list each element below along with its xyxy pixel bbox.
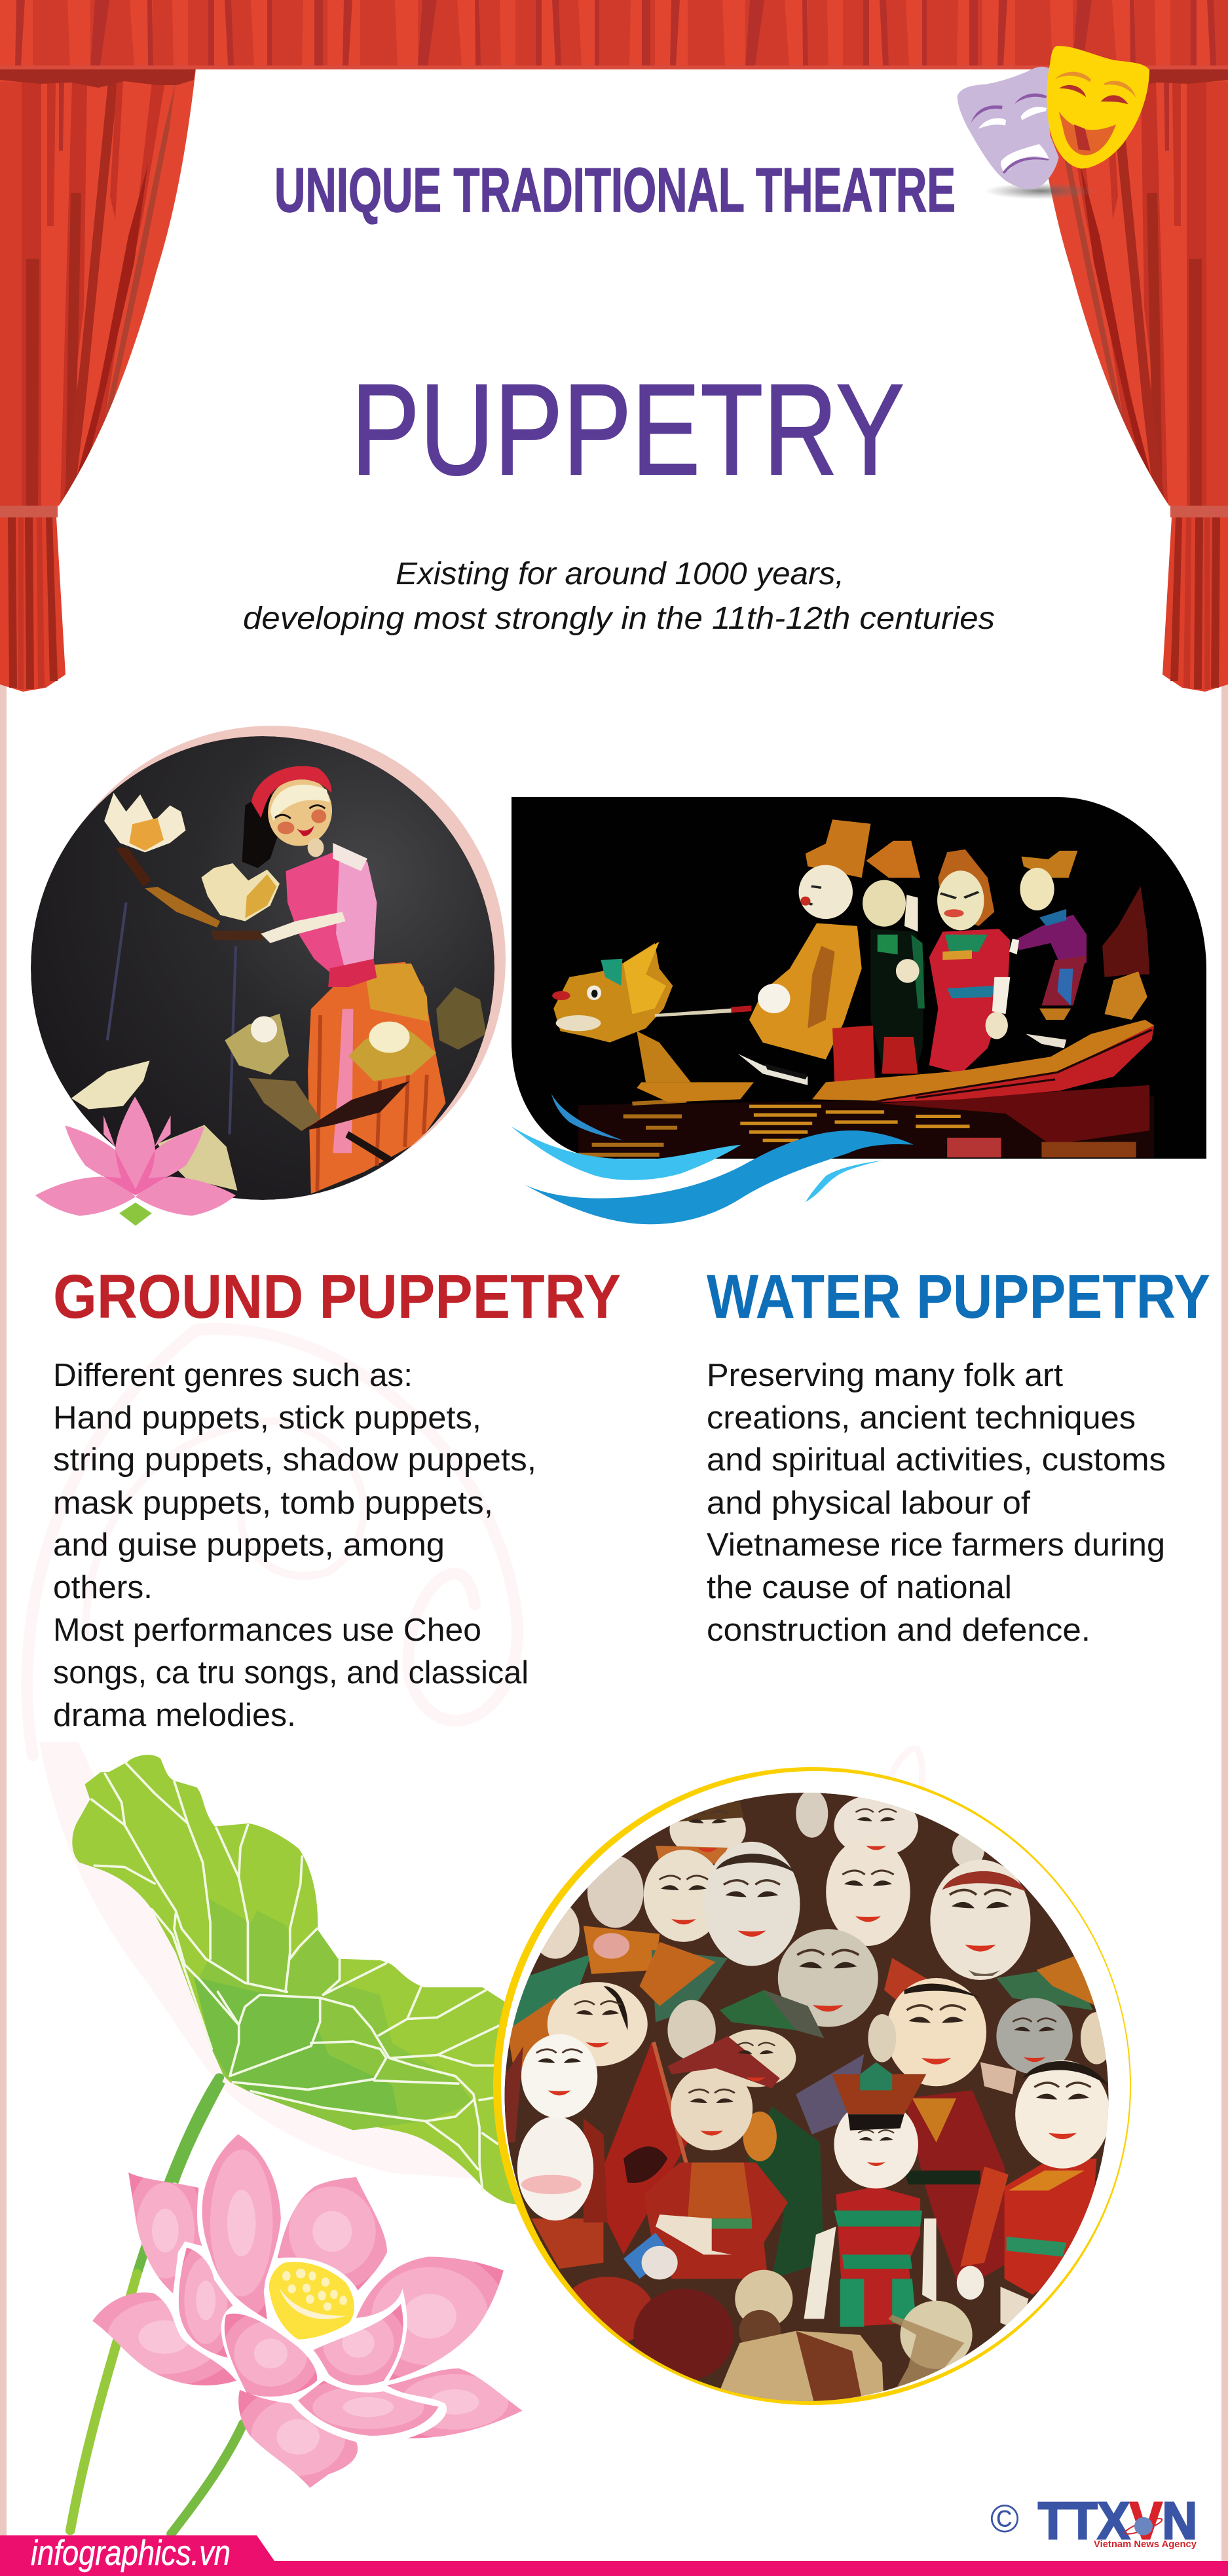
text: ground puppetry description: and guise puppets, among (53, 1527, 445, 1563)
flower 1 (104, 793, 185, 852)
petals (92, 2134, 523, 2488)
green coat (748, 2106, 824, 2279)
photo: crowd of painted water puppets (503, 1789, 1113, 2410)
puppet facial features (536, 1809, 1090, 2166)
central puppet (644, 2163, 788, 2279)
heading: ground puppetry: GROUND PUPPETRY (53, 1262, 621, 1332)
yellow ring around puppets photo (493, 1767, 1131, 2405)
green hat puppet (716, 2029, 796, 2087)
text: water puppetry description (707, 1358, 1166, 1648)
text: ground puppetry description: Different genres such as: (53, 1358, 413, 1393)
red middle puppet (904, 2090, 1009, 2290)
icon: blue waves (511, 1094, 914, 1224)
heading: puppetry: PUPPETRY (351, 357, 904, 502)
text: ground puppetry description: drama melodies. (53, 1698, 296, 1733)
text: water puppetry description: Vietnamese rice farmers during (707, 1527, 1165, 1563)
text: water puppetry description: and physical labour of (707, 1485, 1030, 1521)
footer pink bar (0, 2561, 1228, 2576)
lotus pads (71, 1060, 149, 1110)
skirt (308, 962, 445, 1194)
bearded puppet (930, 1859, 1030, 1980)
text: ground puppetry description: songs, ca tru songs, and classical (53, 1655, 529, 1690)
faint pink arc behind leaf (39, 1742, 485, 2178)
dragon (637, 1031, 691, 1082)
decorative swirl background (27, 1329, 922, 1913)
bodice (286, 852, 377, 978)
photo: ground puppet with lotus flowers (31, 736, 494, 1200)
crown woman puppet (836, 2186, 920, 2327)
icon: small pink lotus (35, 1096, 236, 1225)
text: ground puppetry description: mask puppets, tomb puppets, (53, 1485, 493, 1521)
photo: water puppets on dragon boat (512, 797, 1206, 1159)
subtitle text: Existing for around 1000 years, (396, 557, 844, 591)
text: ground puppetry description (53, 1358, 536, 1733)
buds (348, 1022, 436, 1081)
flower 2 (201, 863, 280, 922)
arm stick (145, 887, 220, 927)
happy mask (1047, 46, 1149, 168)
right stage curtain (1032, 69, 1228, 692)
bottom toys (561, 2277, 654, 2345)
back row puppets (669, 1802, 746, 1857)
logo: TTXVN Vietnam News Agency: TTXVN (1038, 2492, 1197, 2550)
text: ground puppetry description: string puppets, shadow puppets, (53, 1442, 536, 1478)
flag (603, 2042, 688, 2254)
text: water puppetry description: the cause of national (707, 1570, 1012, 1605)
logo: TTXVN Vietnam News Agency: Vietnam News Agency (1094, 2539, 1197, 2550)
curtain valance (0, 0, 1228, 69)
lotus flower and stems (70, 2078, 523, 2534)
back puppet (1022, 851, 1077, 878)
stems (70, 2078, 243, 2534)
leaf stem (174, 2081, 221, 2182)
text: water puppetry description: and spiritual activities, customs (707, 1442, 1166, 1478)
subtitle text: developing most strongly in the 11th-12th centuries (243, 601, 995, 636)
text: ground puppetry description: Hand puppets, stick puppets, (53, 1400, 481, 1436)
seed pod (269, 2262, 354, 2340)
text: ground puppetry description: Most performances use Cheo (53, 1613, 481, 1648)
strings (107, 903, 236, 1134)
footer tab with site name: infographics.vn (31, 2533, 231, 2573)
flame prow (1102, 886, 1149, 977)
text: water puppetry description: Preserving many folk art (707, 1358, 1063, 1393)
hair and hat (242, 790, 280, 868)
pink circle backing (38, 726, 506, 1193)
lotus leaf illustration (72, 1755, 524, 2205)
white belly puppet (531, 2218, 603, 2269)
text: ground puppetry description: others. (53, 1570, 153, 1605)
sad mask (958, 67, 1059, 189)
king puppet (806, 819, 870, 878)
grey puppet (778, 1929, 878, 2027)
left stage curtain (0, 69, 196, 692)
icon: theatre masks (958, 46, 1149, 199)
second puppet (866, 841, 920, 878)
text: water puppetry description: creations, ancient techniques (707, 1400, 1136, 1436)
head (268, 779, 333, 846)
side border strips (0, 681, 1228, 2561)
text: water puppetry description: construction and defence. (707, 1613, 1090, 1648)
logo: TTXVN Vietnam News Agency: © (990, 2497, 1019, 2541)
subtitle text (243, 557, 995, 636)
boat hull (812, 1020, 1154, 1101)
mask shadow (984, 183, 1098, 199)
queen puppet (938, 849, 994, 926)
right puppet (1005, 2158, 1096, 2295)
background clothing (512, 1954, 591, 2042)
reflection (578, 1096, 1154, 1157)
